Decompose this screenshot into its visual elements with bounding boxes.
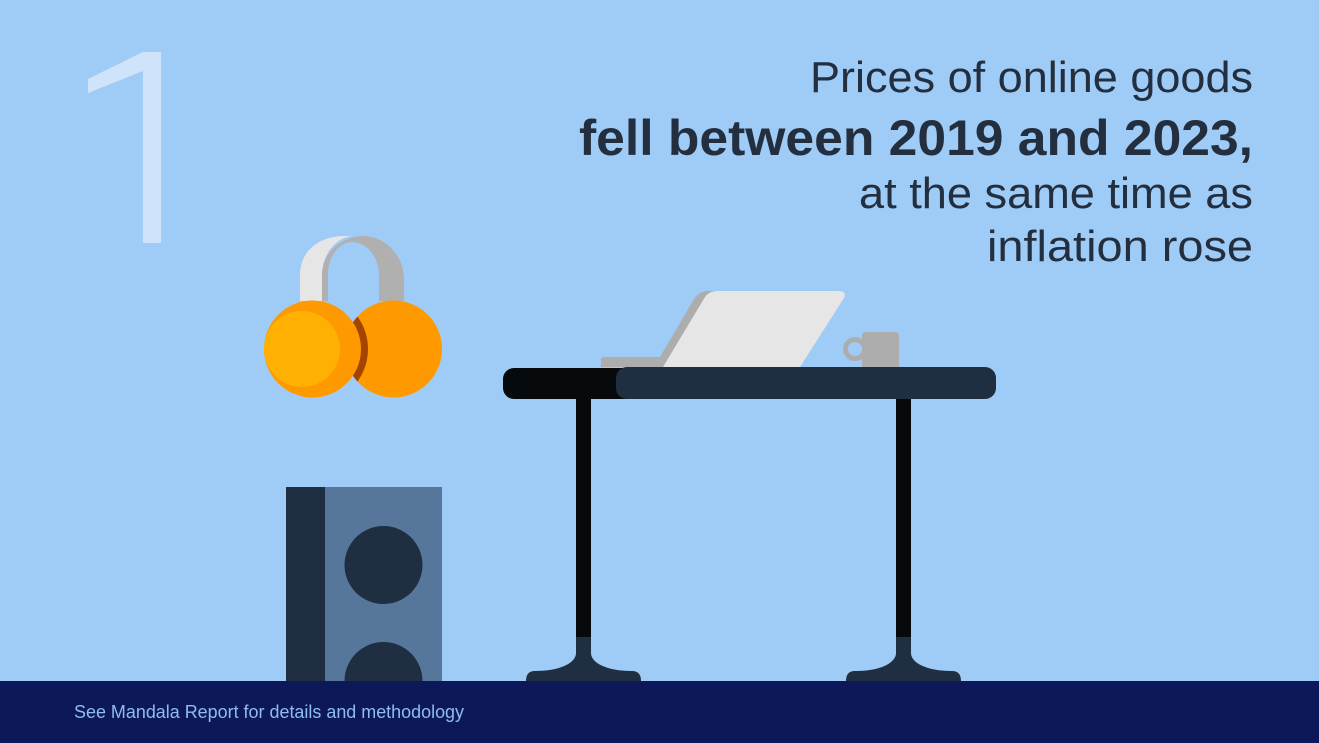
footer band <box>0 681 1319 743</box>
headline <box>579 53 1253 271</box>
footer note: See Mandala Report for details and methodology <box>74 702 464 722</box>
icon: headphones <box>257 236 442 404</box>
big number 1 <box>88 52 161 243</box>
desk <box>503 367 996 681</box>
headline: at the same time as <box>859 169 1253 218</box>
headline: Prices of online goods <box>810 53 1253 102</box>
icon: speaker <box>286 487 442 720</box>
icon: mug <box>846 332 899 367</box>
headline: inflation rose <box>987 222 1253 271</box>
headline: fell between 2019 and 2023, <box>579 110 1253 166</box>
big number 1: 1 <box>72 0 222 331</box>
icon: laptop <box>601 291 845 367</box>
